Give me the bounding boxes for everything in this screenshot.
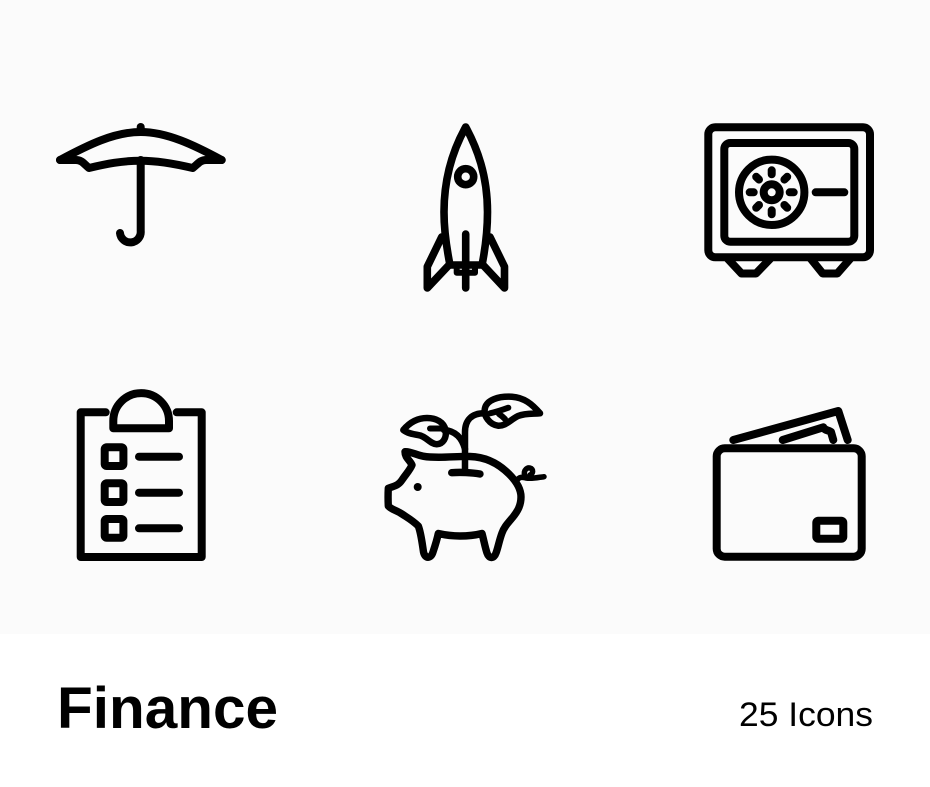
panel: footer [0,634,930,787]
icon: piggy bank with sprout [388,397,544,558]
icon: piggy eye [414,483,422,491]
title: Finance [57,676,278,741]
icon: rocket [427,127,504,288]
icon: clipboard checklist [81,393,202,557]
icon count: 25 Icons [739,696,873,734]
icon: wallet with bills [717,411,862,557]
icon: umbrella [60,127,222,242]
icon: safe [708,127,870,274]
